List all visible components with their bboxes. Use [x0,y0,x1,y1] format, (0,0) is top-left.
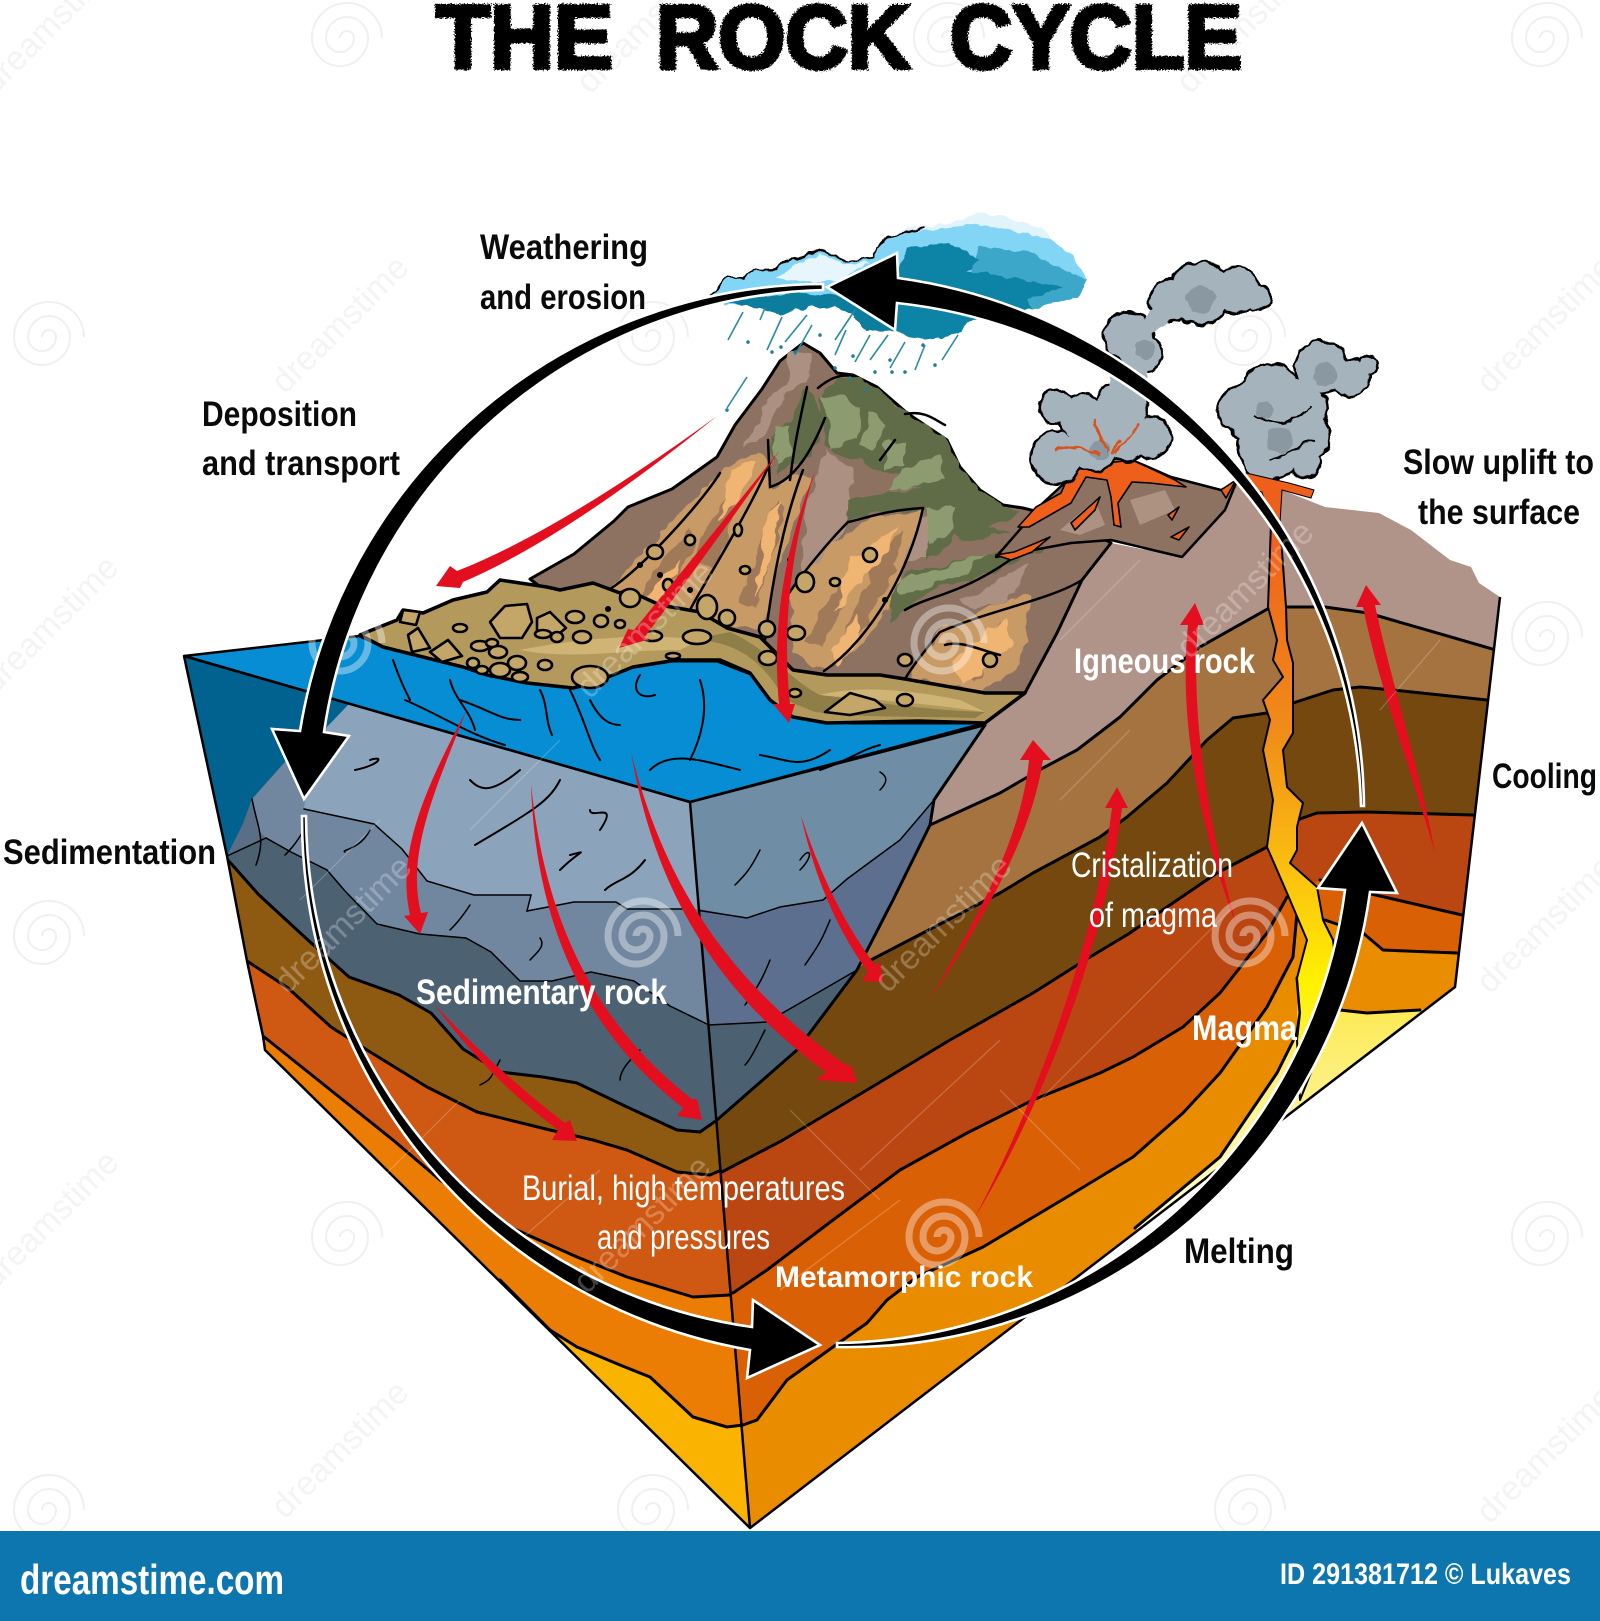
orange layer [264,1039,740,1427]
strata lines left [227,859,760,1427]
label: burial, high temperatures and pressures: and pressures [597,1218,770,1257]
left face of the block: strata cross-section [170,640,770,1540]
label: slow uplift to the surface: the surface [1418,493,1580,532]
arrow: mountain to sea [773,471,815,723]
dark green vegetation left strip [770,387,823,473]
red-brown layer [722,814,1474,1292]
arrow: deposition slope [436,416,717,588]
sedimentary rock right face dark [710,973,853,1118]
label: crystallization of magma: of magma [1089,896,1217,935]
sediment streaks [520,632,985,718]
cloud dark right [890,243,1063,340]
volcano light flank patches [1060,490,1175,535]
scree slope 2 [789,508,923,671]
label: weathering and erosion: and erosion [480,278,646,317]
label: magma: Magma [1192,1009,1297,1048]
thin band lines and cracks [227,759,709,1085]
rain [727,308,958,410]
red process arrows [404,416,1435,1219]
right volcano ash cloud [1218,342,1376,482]
dark green vegetation lower [887,527,1071,622]
diagonal watermark text: dreamstime [566,1148,718,1301]
cloud edge [710,228,925,295]
label: sedimentation: Sedimentation [3,833,216,872]
label: burial, high temperatures and pressures [522,1169,845,1257]
light brown layer [860,608,1492,967]
mottled colour patches [610,352,1071,693]
arrow: burial to metamorphic [434,1004,577,1141]
sedimentary rock right face light [685,725,985,918]
orange layer [732,880,1462,1424]
deepest gold layer [480,1260,748,1525]
text: dreamstime [264,248,416,401]
right face of the block: strata cross-section [680,470,1510,1540]
magma conduit rising from chamber to volcano [1263,523,1340,1100]
water cross-section [186,658,348,856]
label: deposition and transport [202,395,400,483]
diagonal watermark text [267,513,1321,1301]
arrow: uplift left [929,740,1051,1001]
volcano lava flows [996,458,1236,560]
dark brown layer [718,688,1487,1170]
sea surface (top of block) [184,636,985,802]
cloud pale top haze [890,212,1050,250]
light green patches [775,393,990,595]
label: deposition and transport: Deposition [202,395,357,434]
cycle arrow: sedimentation to metamorphism [302,816,820,1378]
slate sliver [227,799,266,856]
block outline [184,597,1500,1528]
label: deposition and transport: and transport [202,444,400,483]
rock right face lines [690,725,985,1120]
scree slope 3 [905,596,1030,693]
translucent watermark spirals [312,608,1285,1265]
label: sedimentary rock: Sedimentary rock [416,973,667,1012]
diagonal watermark text: dreamstime [267,848,419,1001]
arrow: erosion to sediment [619,450,780,648]
mountain [530,343,1236,723]
sea surface cracks [393,660,880,770]
dark lower sedimentary band [228,705,715,1130]
scree brown streaks [640,480,1005,680]
volcano left flank body [996,457,1236,557]
footer brand: dreamstime.com [20,1556,284,1603]
label: weathering and erosion: Weathering [480,228,648,267]
label: slow uplift to the surface [1403,443,1594,532]
cycle arrow: melting to cooling [837,823,1397,1347]
sedimentary rock right face middle [700,804,932,1024]
light mauve highlights [745,352,1030,610]
igneous mauve layer [932,484,1500,822]
amber layer [742,921,1458,1526]
cloud highlight [775,254,870,282]
cloud light body [710,224,1088,340]
label: crystallization of magma: Cristalization [1071,846,1233,885]
storm cloud [710,212,1088,340]
arrow: magma crystallisation [974,787,1128,1219]
label: burial, high temperatures and pressures: Burial, high temperatures [522,1169,845,1208]
scree light streaks [640,460,1010,685]
right side strata lines [720,607,1496,1425]
left volcano ash cloud [1032,263,1269,482]
sediment body [360,580,1025,723]
diagonal watermark text: dreamstime [1169,513,1321,666]
label: melting: Melting [1184,1232,1294,1271]
cycle arrow: weathering to sedimentation [272,284,823,799]
scree slope 1 [610,450,811,629]
sediment and boulder shoreline [360,524,1025,723]
label: weathering and erosion [480,228,648,317]
boulders [400,524,997,715]
brown layer [230,864,719,1174]
pale yellow layer [1136,1002,1425,1230]
label: igneous rock: Igneous rock [1074,642,1255,681]
arrow: sediment burial 4 [801,816,883,982]
diagonal watermark text: dreamstime [569,553,721,706]
arrow: sediment burial 2 [531,784,702,1120]
small dark stones [608,560,885,609]
footer bar [0,1531,1600,1621]
title [436,0,1242,88]
dark green vegetation main [820,376,1020,563]
light upper sedimentary band [304,704,698,910]
label: metamorphic rock: Metamorphic rock [775,1261,1033,1294]
cycle arrow: uplift over the top to weathering [827,253,1364,806]
cloud mid tone [967,247,1088,310]
mountain ridge lines [610,376,1082,679]
arrow: sediment burial 1 [404,711,466,934]
label: crystallization of magma [1071,846,1233,935]
arrow: through igneous rock [1180,603,1237,927]
mountain body [530,343,1111,723]
right volcano lava vent [1246,473,1314,523]
text: dreamstime [264,1373,416,1526]
cloud dark underside [723,292,897,332]
middle sedimentary band [228,704,707,1024]
arrow: sediment burial 3 [631,752,857,1083]
diagonal watermark text: dreamstime [867,847,1019,1000]
red-orange layer [249,964,730,1296]
arrow: uplift right [1356,585,1435,853]
